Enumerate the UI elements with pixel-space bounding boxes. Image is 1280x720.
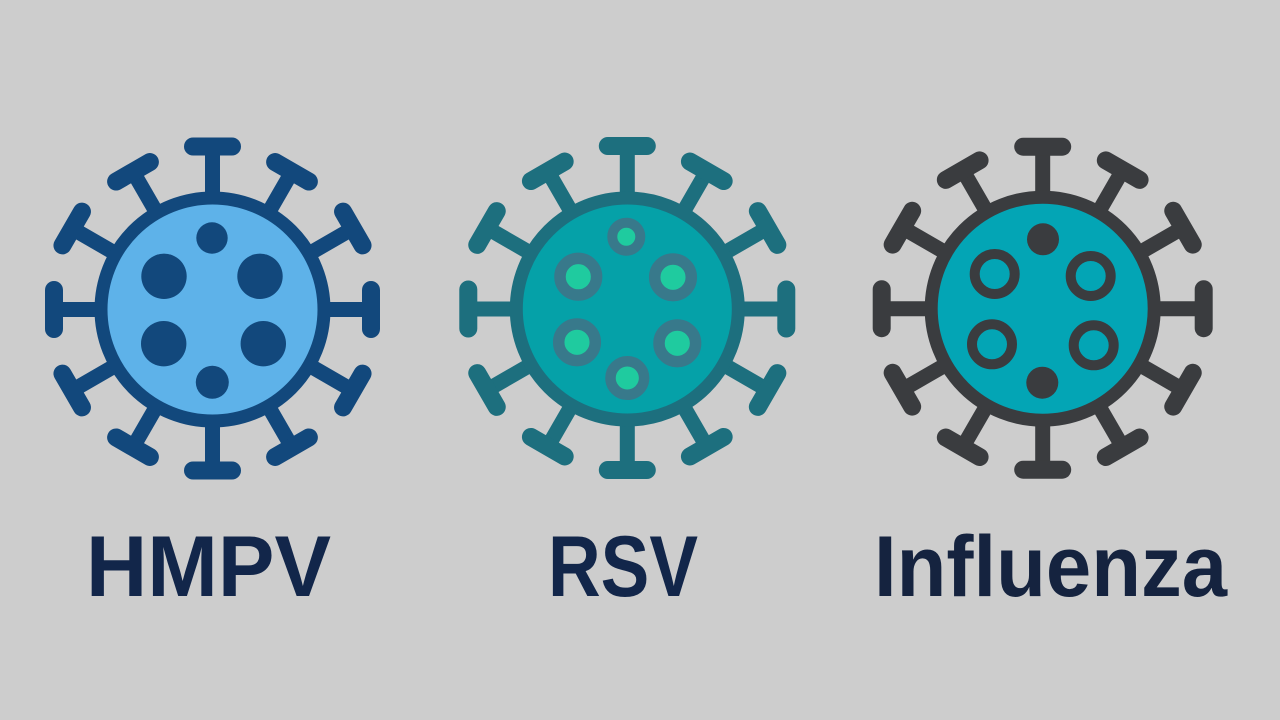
RSV inner particles xyxy=(559,223,696,395)
Influenza inner particles xyxy=(972,223,1114,399)
HMPV inner particles xyxy=(141,222,286,399)
label: RSV: RSV xyxy=(548,519,698,615)
label: HMPV: HMPV xyxy=(86,519,331,615)
Influenza spikes xyxy=(882,147,1204,470)
icon: Influenza virus xyxy=(882,147,1204,470)
RSV spikes xyxy=(468,146,786,470)
label: Influenza: Influenza xyxy=(874,519,1228,615)
icon: HMPV virus xyxy=(54,146,371,470)
HMPV body xyxy=(101,198,324,421)
RSV body xyxy=(516,198,738,420)
HMPV spikes xyxy=(54,146,371,470)
icon: RSV virus xyxy=(468,146,786,470)
Influenza body xyxy=(931,197,1154,420)
